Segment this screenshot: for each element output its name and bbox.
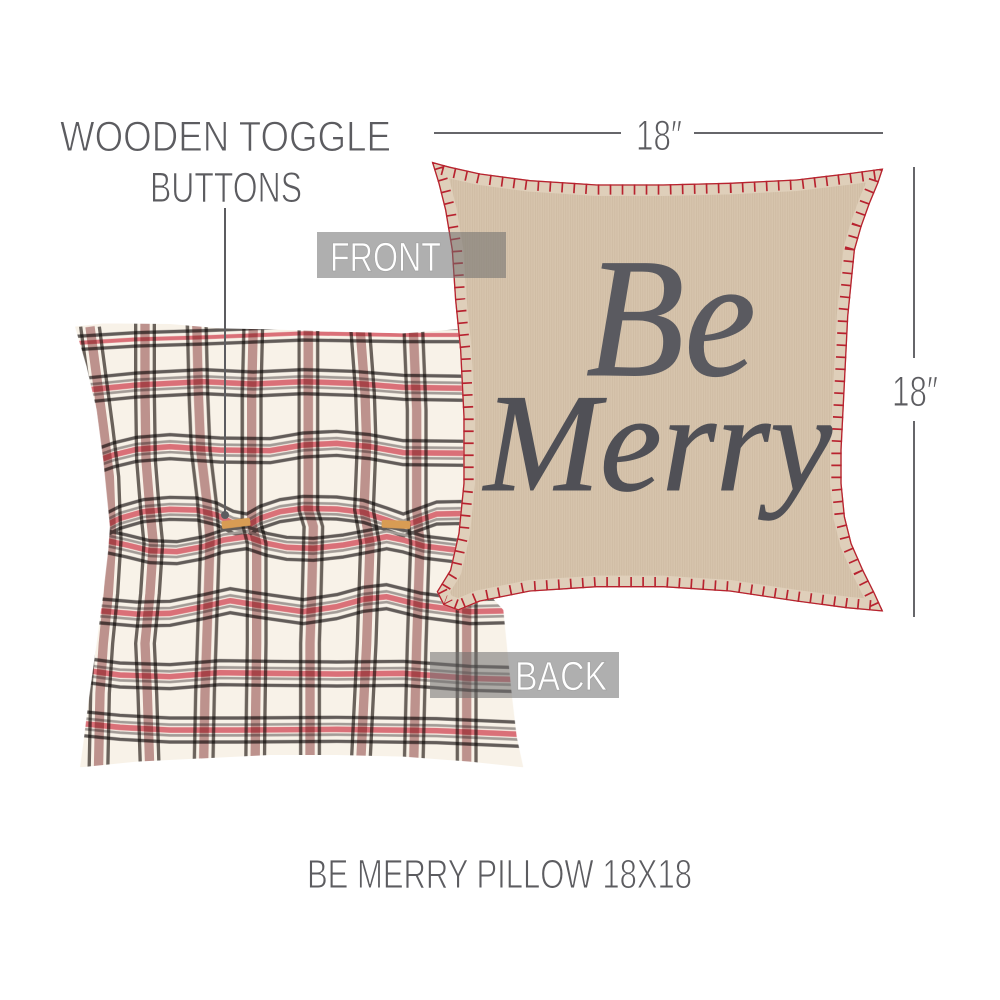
embroidered word: Be: Be	[586, 224, 756, 412]
height dimension: 18 inches: 18″	[892, 368, 938, 416]
icon: wooden toggle button left	[221, 518, 251, 529]
vertical plaid bands	[81, 320, 476, 777]
back pillow: cream plaid	[70, 310, 537, 777]
horizontal plaid bands	[70, 327, 537, 747]
tag: back	[430, 652, 619, 699]
tag: front: FRONT	[330, 234, 441, 280]
callout label: wooden toggle buttons: BUTTONS	[150, 164, 302, 212]
stitched border flap	[432, 162, 883, 612]
callout leader line with dot	[221, 208, 229, 519]
callout label: wooden toggle buttons	[60, 113, 391, 212]
callout label: wooden toggle buttons: WOODEN TOGGLE	[60, 113, 391, 161]
width dimension: 18 inches: 18″	[636, 112, 682, 160]
embroidered word: Merry: Merry	[482, 366, 833, 521]
front pillow: tan Be Merry with blanket stitch	[432, 162, 883, 612]
infographic canvas	[60, 120, 937, 888]
icon: wooden toggle button right	[381, 520, 411, 529]
caption: BE MERRY PILLOW 18X18	[307, 851, 692, 897]
tag: back: BACK	[515, 653, 607, 699]
